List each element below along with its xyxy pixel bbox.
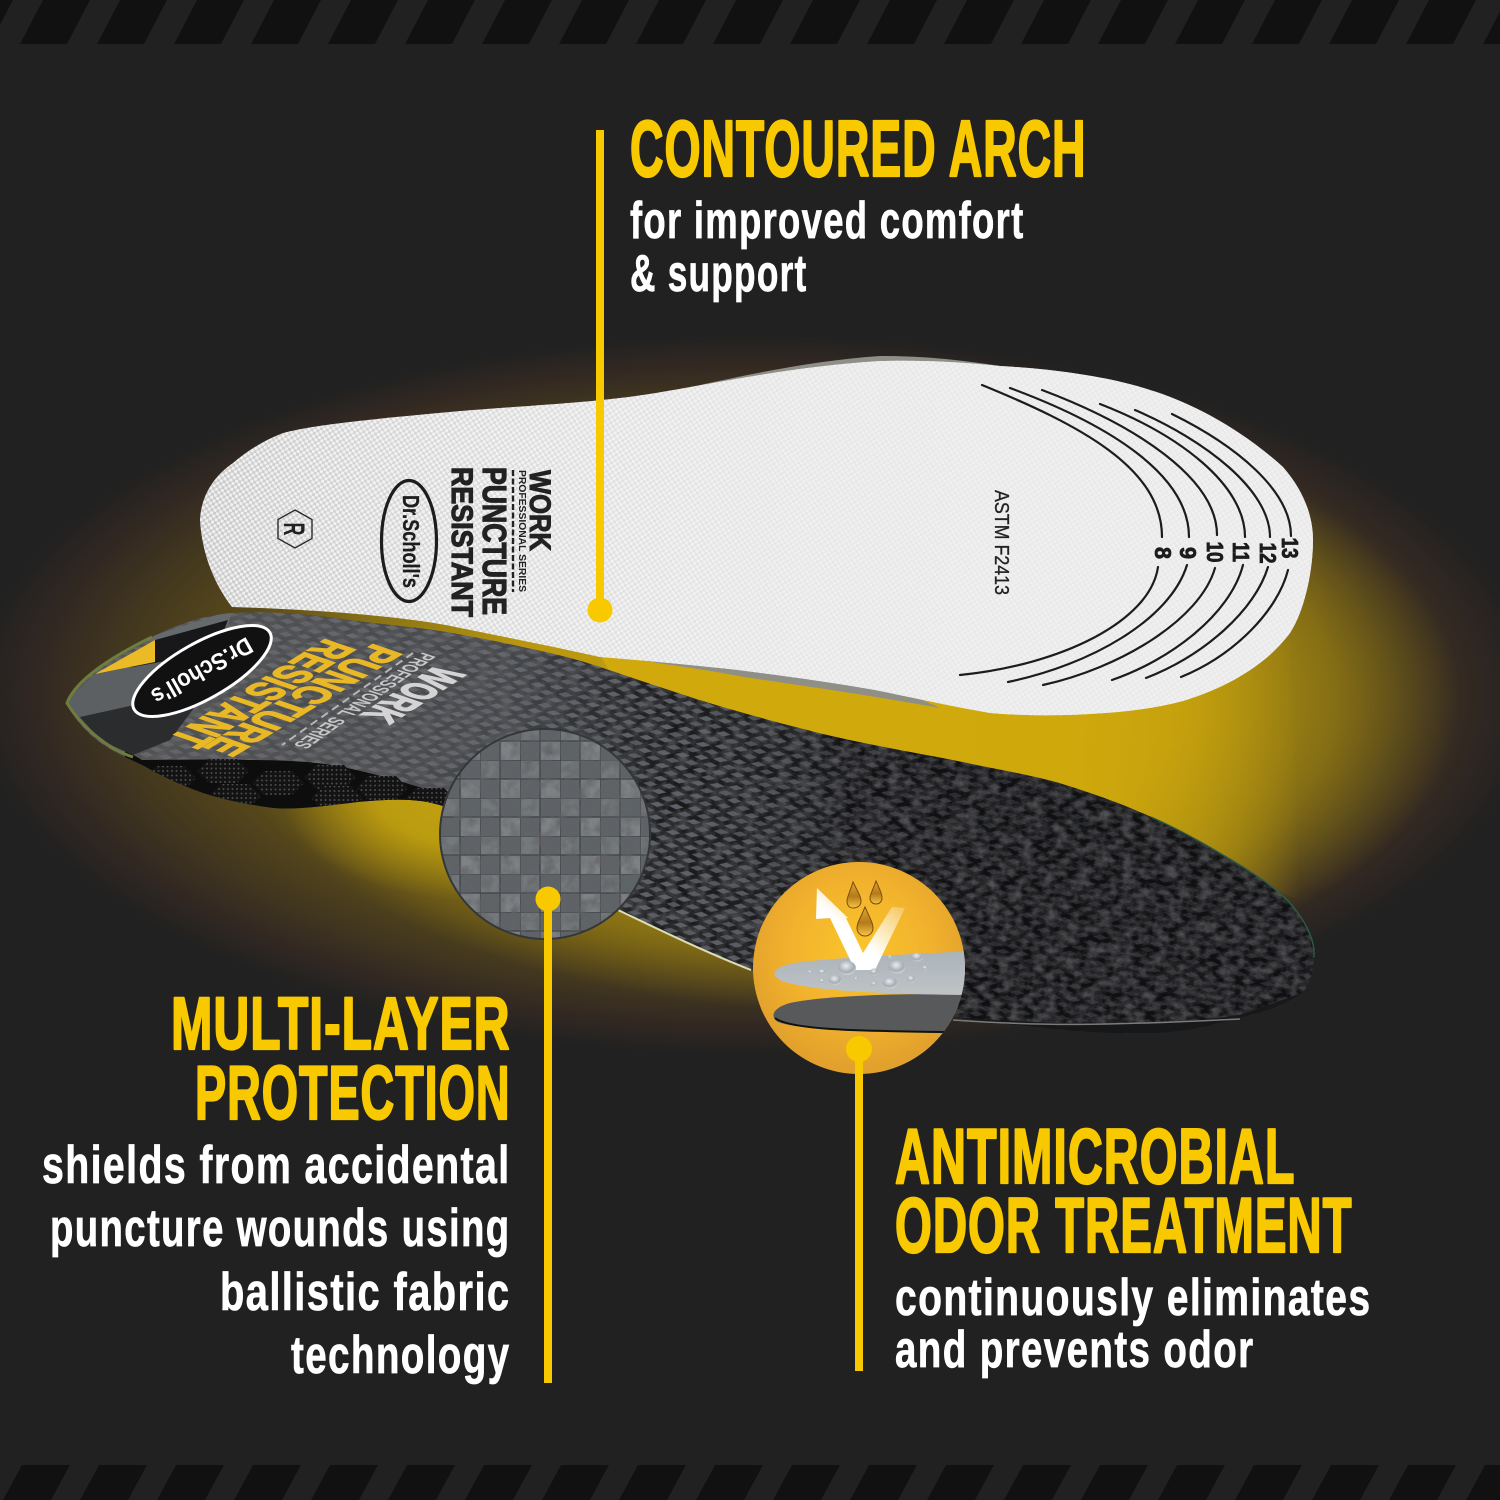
heel edge band xyxy=(956,994,1300,1034)
yellow glow behind insoles xyxy=(0,335,1500,1055)
rotated product wordmark: PUNCTURE xyxy=(476,467,513,615)
ASTM label: ASTM F2413 xyxy=(990,490,1012,595)
text block: contoured arch xyxy=(630,104,1086,303)
Dr. Scholl's oval logo: Dr.Scholl's xyxy=(398,495,424,588)
toe corner patches xyxy=(60,610,232,755)
shoe size numbers: 11 xyxy=(1228,542,1254,562)
upside-down product wordmark: WORK xyxy=(351,662,475,728)
shoe size numbers: 13 xyxy=(1277,538,1303,558)
callout line: contoured arch xyxy=(588,130,612,622)
antimicrobial detail circle xyxy=(753,862,970,1074)
shoe size trim lines xyxy=(960,385,1291,685)
upside-down Dr. Scholl's oval logo: Dr.Scholl's xyxy=(146,631,257,710)
upside-down product wordmark xyxy=(157,634,475,761)
text block: multi-layer protection: MULTI-LAYER xyxy=(171,982,510,1065)
text block: antimicrobial odor treatment: and prevents odor xyxy=(895,1321,1254,1379)
shoe size numbers: 10 xyxy=(1202,542,1228,562)
hexagon size mark R: R xyxy=(277,523,310,536)
upside-down Dr. Scholl's oval logo xyxy=(120,608,284,734)
shoe size numbers: 8 xyxy=(1150,547,1176,559)
white arrow xyxy=(816,888,905,970)
lower dark layer xyxy=(774,994,970,1033)
text block: multi-layer protection: shields from accidental xyxy=(42,1136,510,1195)
text block: antimicrobial odor treatment xyxy=(895,1112,1372,1379)
bottom hazard stripes xyxy=(0,1465,1500,1500)
text block: multi-layer protection: ballistic fabric xyxy=(220,1263,510,1322)
shoe size numbers: 9 xyxy=(1175,547,1201,559)
water beads xyxy=(808,952,928,988)
dark lower insole xyxy=(60,600,1330,1050)
rotated product wordmark: PROFESSIONAL SERIES xyxy=(516,470,527,592)
top hazard stripes xyxy=(0,0,1500,44)
upside-down product wordmark: PUNCTURE xyxy=(193,640,413,761)
hex underside band xyxy=(125,752,448,808)
white top insole xyxy=(200,356,1313,900)
rotated product wordmark: WORK xyxy=(523,470,556,551)
insole rim highlight xyxy=(618,910,751,970)
text block: contoured arch: & support xyxy=(630,245,808,303)
text block: contoured arch: for improved comfort xyxy=(630,192,1024,250)
text block: multi-layer protection: PROTECTION xyxy=(195,1051,510,1136)
upside-down product wordmark: RESISTANT xyxy=(157,634,366,752)
callout line: multi-layer protection xyxy=(536,886,560,1383)
hexagon size mark R xyxy=(277,510,312,548)
text block: multi-layer protection xyxy=(42,982,511,1385)
oil drops xyxy=(847,881,882,936)
upside-down product wordmark: PROFESSIONAL SERIES xyxy=(288,651,441,751)
rotated product wordmark: RESISTANT xyxy=(445,467,478,617)
text block: contoured arch: CONTOURED ARCH xyxy=(630,104,1086,193)
upper gray layer xyxy=(775,951,970,995)
text block: multi-layer protection: technology xyxy=(291,1326,510,1385)
text block: multi-layer protection: puncture wounds using xyxy=(50,1199,511,1258)
Dr. Scholl's oval logo xyxy=(382,480,436,602)
shoe size numbers: 12 xyxy=(1255,542,1281,564)
rotated product wordmark xyxy=(445,467,556,617)
callout line: antimicrobial treatment xyxy=(846,1036,872,1371)
shoe size numbers xyxy=(1150,538,1303,564)
magnified fabric circle xyxy=(439,728,651,940)
